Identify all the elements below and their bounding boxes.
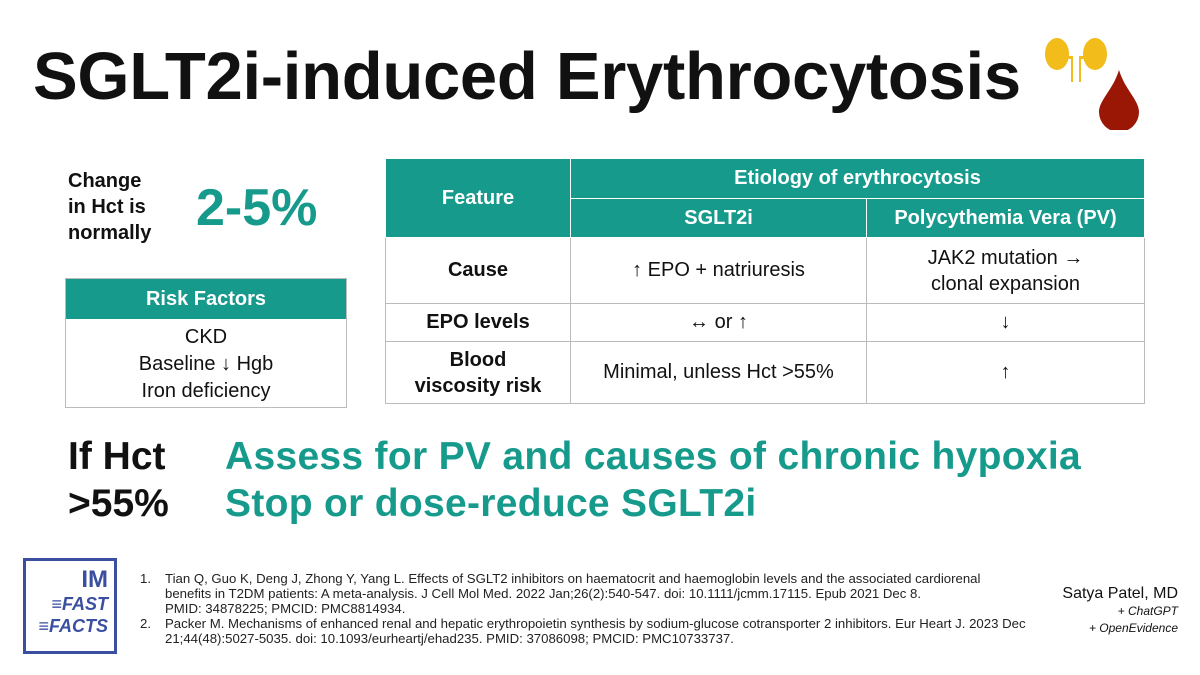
label: If Hct >55% [68,435,169,525]
list: risk factors: Baseline ↓ Hgb [139,353,273,375]
actions: Stop or dose-reduce SGLT2i [225,482,756,525]
actions [225,435,1081,525]
heading: risk factors [66,279,346,319]
heading: risk factors: Risk Factors [146,288,266,310]
table: etiology comparison: ↑ EPO + natriuresis [632,259,805,281]
references: Tian Q, Guo K, Deng J, Zhong Y, Yang L. Effects of SGLT2 inhibitors on haematocrit and haemoglobin levels and the associated cardiorenal [165,571,980,586]
logo: IM Fast Facts: IM [81,566,108,593]
table: etiology comparison: Feature [442,186,514,208]
table: etiology comparison: Minimal, unless Hct >55% [603,361,834,383]
table: etiology comparison: EPO levels [426,311,530,333]
author credit: Satya Patel, MD [1062,585,1178,602]
title: SGLT2i-induced Erythrocytosis [33,39,1021,114]
list: risk factors: CKD [185,326,227,348]
label: change in Hct: in Hct is [68,196,146,218]
references [140,571,1026,646]
table: etiology comparison: Etiology of erythrocytosis [734,167,981,189]
table: etiology comparison: Polycythemia Vera (PV) [894,206,1117,228]
table: etiology comparison: ↓ [1000,311,1010,333]
table: etiology comparison: JAK2 mutation → [928,246,1083,268]
table: etiology comparison: SGLT2i [684,206,753,228]
list: risk factors [139,326,273,402]
logo: IM Fast Facts [23,558,117,654]
icon: blood drop [1099,70,1139,132]
table: etiology comparison: Blood [450,348,506,370]
references: 21;44(48):5027-5035. doi: 10.1093/eurheartj/ehad235. PMID: 37086098; PMCID: PMC10733737. [165,631,734,646]
label: change in Hct: Change [68,170,141,192]
label: If Hct >55%: If Hct [68,435,166,478]
table: etiology comparison: clonal expansion [931,272,1080,294]
author credit: + OpenEvidence [1089,621,1178,635]
references: benefits in T2DM patients: A meta-analysis. J Cell Mol Med. 2022 Jan;26(2):540-547. doi: 10.1111/jcmm.17115. Epub 2021 Dec 8. [165,586,921,601]
author credit [1062,585,1179,635]
logo: IM Fast Facts: ≡FAST [51,594,108,614]
label: If Hct >55%: >55% [68,482,169,525]
table: etiology comparison: ↑ [1000,361,1010,383]
references: 2. [140,616,151,631]
logo: IM Fast Facts: ≡FACTS [38,616,108,636]
table: etiology comparison: ↔ or ↑ [689,311,748,333]
actions: Assess for PV and causes of chronic hypoxia [225,435,1081,478]
references: 1. [140,571,151,586]
panel: risk factors [65,278,347,408]
label: change in Hct: normally [68,222,151,244]
icon: kidneys and blood drop [1045,38,1139,130]
references: PMID: 34878225; PMCID: PMC8814934. [165,601,405,616]
table: etiology comparison [385,159,1145,404]
table: etiology comparison: viscosity risk [415,374,541,396]
stat: 2-5%: 2-5% [196,179,317,237]
icon: kidneys [1045,38,1107,82]
references: Packer M. Mechanisms of enhanced renal and hepatic erythropoietin synthesis by sodium-glucose cotransporter 2 inhibitors. Eur Heart J. 2023 Dec [165,616,1026,631]
label: change in Hct [68,170,152,244]
table: etiology comparison: Cause [448,259,508,281]
author credit: + ChatGPT [1118,604,1178,618]
list: risk factors: Iron deficiency [142,380,270,402]
